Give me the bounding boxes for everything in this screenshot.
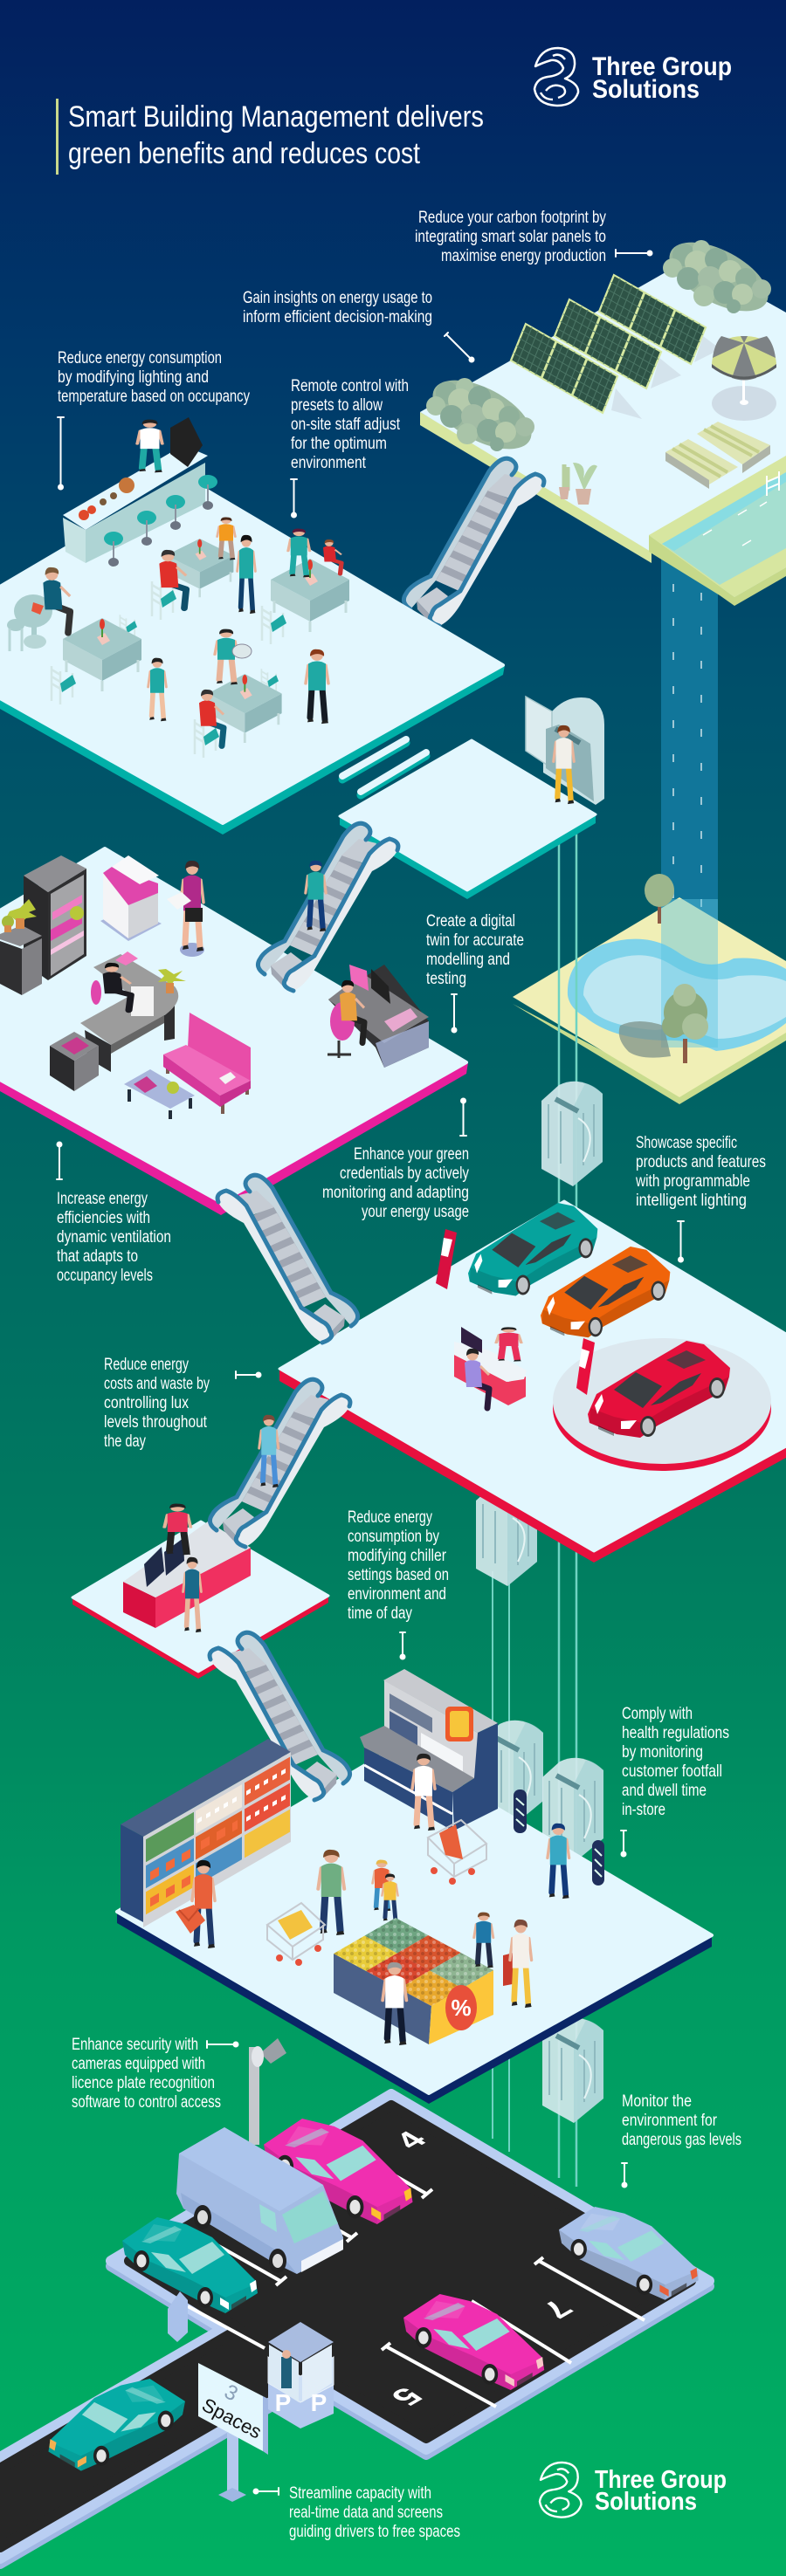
reception desk [123, 1522, 251, 1628]
callout: health regulations: Comply with [622, 1705, 693, 1723]
parking booth: P [311, 2389, 327, 2416]
bush: left [422, 366, 542, 464]
car park surface [0, 2094, 709, 2564]
callout: security cameras [72, 2036, 221, 2112]
callout: lux levels: the day [104, 1432, 146, 1451]
connector: green credentials [460, 1098, 466, 1136]
elevator pod: car park [542, 2018, 603, 2123]
person: child [373, 1860, 390, 1911]
elevator pod: upper [541, 1082, 603, 1186]
callout: chiller settings: consumption by [348, 1528, 439, 1546]
callout: lighting and temperature: by modifying lighting and [58, 368, 209, 387]
callout: green credentials: your energy usage [362, 1203, 469, 1221]
callout: carbon footprint: maximise energy production [441, 247, 606, 265]
callout: health regulations: customer footfall [622, 1762, 722, 1781]
tree: large [662, 984, 708, 1063]
callout: intelligent lighting: intelligent lighting [636, 1192, 747, 1210]
tables and chairs [7, 539, 349, 758]
coffee table [124, 1069, 195, 1119]
callout: dynamic ventilation: that adapts to [57, 1247, 138, 1266]
person: older woman [383, 1962, 406, 2045]
revolving door [526, 697, 604, 805]
title accent bar [56, 99, 59, 175]
person: receptionist [164, 1504, 190, 1555]
waterfall [661, 541, 718, 951]
callout: streamline capacity: guiding drivers to free spaces [289, 2523, 460, 2541]
connector: gas levels [622, 2163, 627, 2188]
solar panel array [511, 275, 720, 419]
cabinet with plants [0, 899, 42, 995]
callout: digital twin: Create a digital [426, 912, 515, 931]
callout: chiller settings: Reduce energy [348, 1508, 432, 1527]
car: pink top row [264, 2119, 412, 2224]
connector: dynamic ventilation [56, 1142, 63, 1179]
callout: gas levels: dangerous gas levels [622, 2131, 741, 2149]
callout: lux levels: levels throughout [104, 1413, 208, 1432]
connector: remote control [291, 479, 297, 519]
turntable [553, 1338, 771, 1471]
bay number 4: 4 [388, 2126, 435, 2154]
callout: intelligent lighting [635, 1134, 766, 1210]
bay number 7: 7 [533, 2295, 580, 2323]
bay number 5: 5 [383, 2382, 430, 2410]
shopping cart: left [267, 1903, 325, 1966]
callout: intelligent lighting: with programmable [635, 1172, 750, 1191]
elevator pod: under showroom [476, 1481, 537, 1586]
sales desk [454, 1327, 527, 1408]
person: man with cart [318, 1850, 344, 1935]
parking bay lines [183, 2149, 645, 2407]
security gate sensor [514, 1789, 527, 1833]
title: green benefits and reduces cost [68, 137, 420, 170]
logo: bottom [540, 2463, 727, 2518]
bar stools [104, 475, 217, 567]
spaces sign: Spaces [198, 2394, 265, 2443]
callout: chiller settings: settings based on [348, 1566, 449, 1584]
panel: supermarket floor [117, 1632, 712, 2104]
car: teal on road [48, 2379, 185, 2471]
shopping cart: right [428, 1820, 486, 1885]
security gate sensor [592, 1840, 604, 1886]
staff desk [328, 965, 429, 1068]
callout: green credentials [322, 1145, 469, 1221]
callout: green credentials: Enhance your green [354, 1145, 469, 1164]
elevator pod: store rear [482, 1721, 543, 1825]
produce stand: % [451, 1995, 472, 2021]
title [68, 100, 484, 170]
callout: carbon footprint: integrating smart solar panels to [415, 228, 606, 246]
sun loungers [665, 422, 770, 489]
callout: intelligent lighting: Showcase specific [636, 1134, 737, 1152]
panel: office floor [0, 848, 468, 1215]
callout: lighting and temperature: temperature based on occupancy [58, 388, 250, 406]
elevator pod: store [542, 1758, 603, 1863]
panel: entrance platform [340, 697, 604, 899]
person: barista [137, 420, 162, 472]
callout: green credentials: credentials by actively [340, 1164, 469, 1183]
callout: digital twin [426, 912, 524, 988]
van [176, 2127, 343, 2274]
callout: chiller settings [348, 1508, 449, 1623]
elevator rails [493, 829, 576, 2187]
connector: streamline capacity [253, 2488, 279, 2495]
person: manager [91, 963, 131, 1010]
filing shelves [24, 855, 86, 980]
logo: top [534, 48, 732, 106]
escalator: office to showroom [217, 1175, 358, 1343]
callout: security cameras: licence plate recognition [72, 2074, 215, 2092]
connector: health regulations [620, 1831, 627, 1858]
car: pink lower [403, 2294, 544, 2390]
tree: small [645, 874, 674, 924]
logo: bottom: Three Group [595, 2466, 727, 2494]
callout: chiller settings: modifying chiller [348, 1547, 447, 1565]
callout: lighting and temperature: Reduce energy consumption [58, 349, 222, 368]
person: woman with shopping bag [503, 1920, 532, 2008]
panel: rooftop terrace [420, 228, 786, 606]
pay kiosk and barrier [168, 2291, 265, 2348]
car: silver blue [559, 2207, 699, 2300]
bush: top right [658, 228, 779, 326]
person: child [382, 1874, 398, 1921]
produce stand [334, 1918, 493, 2044]
callout: health regulations [622, 1705, 729, 1819]
parking booth: P [275, 2389, 291, 2416]
icon: three logo mark [534, 48, 578, 106]
sign: upper [436, 1229, 457, 1289]
callout: digital twin: testing [426, 970, 466, 988]
parking booth [268, 2322, 334, 2428]
callout: security cameras: cameras equipped with [72, 2055, 205, 2073]
potted plants [559, 463, 597, 505]
escalator: reception to store [210, 1632, 350, 1800]
logo: top: Solutions [592, 75, 700, 104]
person: shopper at shelf [192, 1860, 215, 1948]
car: red sports [588, 1341, 730, 1438]
panel: restaurant floor [0, 417, 505, 835]
title: Smart Building Management delivers [68, 100, 484, 134]
walkway steps [342, 739, 426, 795]
counter [63, 417, 208, 563]
person: on escalator [306, 861, 326, 931]
callout: energy insights: inform efficient decision-making [243, 308, 432, 326]
escalator: reception to showroom [210, 1379, 350, 1547]
connector: digital twin [451, 994, 458, 1034]
connector: lighting and temperature [58, 417, 64, 491]
shopping basket [176, 1905, 205, 1934]
chiller unit [360, 1669, 498, 1831]
callout: chiller settings: environment and [348, 1585, 446, 1604]
connector: security cameras [207, 2041, 239, 2048]
sign: lower [576, 1338, 595, 1395]
shelf unit [121, 1739, 291, 1927]
callout: security cameras: Enhance security with [72, 2036, 198, 2054]
callout: gas levels: Monitor the [622, 2092, 692, 2111]
connector: lux levels [236, 1371, 262, 1378]
callout: lux levels: Reduce energy [104, 1356, 189, 1374]
person: staff at desk [328, 980, 364, 1058]
logo: top: Three Group [592, 52, 732, 81]
callout: health regulations: health regulations [622, 1724, 729, 1742]
person: office woman [167, 861, 204, 957]
panel: reception platform [72, 1504, 328, 1679]
callout: energy insights: Gain insights on energy usage to [243, 289, 432, 307]
callout: dynamic ventilation: Increase energy [57, 1190, 148, 1208]
people in restaurant [43, 517, 341, 746]
sofa [163, 1013, 251, 1114]
printer [100, 855, 162, 941]
callout: remote control [291, 377, 409, 472]
callout: gas levels: environment for [622, 2112, 718, 2130]
car: teal top row [122, 2217, 258, 2313]
umbrella [712, 336, 776, 421]
callout: remote control: environment [291, 454, 367, 472]
manager desk [80, 951, 186, 1072]
callout: health regulations: and dwell time [622, 1782, 707, 1800]
callout: digital twin: modelling and [426, 951, 510, 969]
callout: lux levels [104, 1356, 210, 1451]
person: on lower escalator [259, 1415, 279, 1487]
callout: health regulations: by monitoring [622, 1743, 703, 1762]
connector: intelligent lighting [678, 1221, 684, 1262]
spaces sign [198, 2363, 268, 2502]
callout: remote control: on-site staff adjust [291, 416, 401, 434]
spaces sign: 3 [220, 2380, 242, 2406]
callout: lighting and temperature [58, 349, 250, 406]
person: visitor [183, 1557, 201, 1632]
icon: three logo mark [540, 2463, 582, 2518]
callout: dynamic ventilation: occupancy levels [57, 1267, 153, 1285]
logo: bottom: Solutions [595, 2488, 697, 2516]
connector: carbon footprint [616, 250, 653, 257]
callout: carbon footprint: Reduce your carbon footprint by [418, 209, 606, 227]
connector: energy insights [445, 333, 475, 363]
camera pole [249, 2038, 286, 2145]
callout: gas levels [622, 2092, 741, 2149]
callout: streamline capacity: Streamline capacity with [289, 2484, 431, 2503]
callout: streamline capacity [289, 2484, 460, 2541]
person: at chiller [412, 1754, 435, 1831]
callout: green credentials: monitoring and adapting [322, 1184, 469, 1202]
callout: health regulations: in-store [622, 1801, 665, 1819]
escalator: office to entrance [258, 823, 398, 991]
car: teal sports [468, 1203, 597, 1296]
callout: security cameras: software to control access [72, 2093, 221, 2112]
lake island [513, 874, 786, 1104]
callout: lux levels: controlling lux [104, 1394, 189, 1412]
terrace pool [649, 456, 786, 606]
callout: remote control: presets to allow [291, 396, 383, 415]
pedestal drawers [50, 1032, 99, 1091]
person: woman with teal top [548, 1824, 569, 1899]
tree shadow [619, 1021, 671, 1058]
panel: car showroom [279, 1201, 786, 1563]
person: man at produce [474, 1913, 493, 1968]
callout: remote control: Remote control with [291, 377, 409, 395]
callout: digital twin: twin for accurate [426, 931, 524, 950]
callout: streamline capacity: real-time data and screens [289, 2504, 443, 2522]
escalator: restaurant to roof [403, 458, 544, 626]
person: entering [554, 725, 574, 804]
callout: dynamic ventilation [57, 1190, 171, 1285]
callout: lux levels: costs and waste by [104, 1375, 210, 1393]
callout: carbon footprint [415, 209, 606, 265]
callout: dynamic ventilation: efficiencies with [57, 1209, 150, 1227]
callout: dynamic ventilation: dynamic ventilation [57, 1228, 171, 1247]
callout: chiller settings: time of day [348, 1604, 412, 1623]
car: orange sports [541, 1247, 670, 1337]
connector: chiller settings [400, 1632, 405, 1660]
callout: remote control: for the optimum [291, 435, 387, 453]
callout: energy insights [243, 289, 432, 326]
